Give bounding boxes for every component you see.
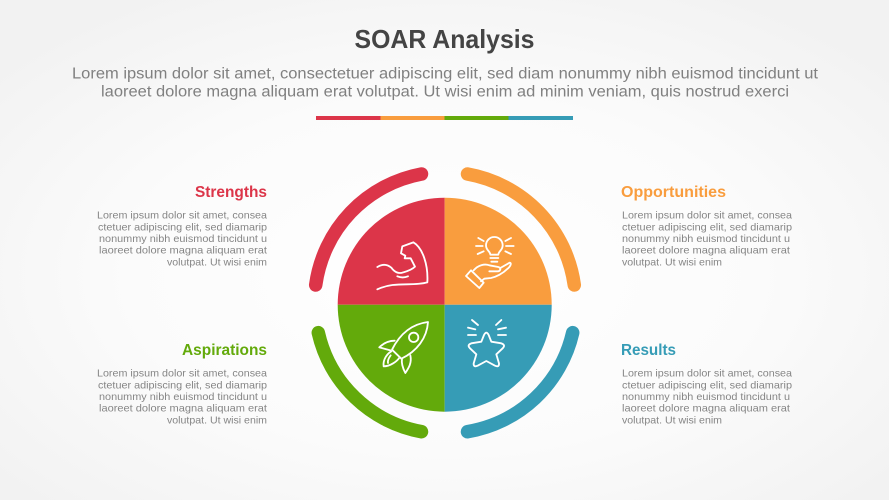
subtitle text [72,66,819,100]
results description: laoreet dolore magna aliquam erat [622,404,790,414]
quadrant: aspirations [338,305,445,412]
aspirations description: volutpat. Ut wisi enim [167,416,267,426]
results description: volutpat. Ut wisi enim [622,416,722,426]
quadrant: opportunities [445,198,552,305]
results description: nonummy nibh euismod tincidunt u [622,392,790,403]
title: SOAR Analysis [354,24,534,54]
quadrant: strengths [338,198,445,305]
opportunities description: Lorem ipsum dolor sit amet, consea [622,210,792,222]
panel: strengths text [97,184,267,268]
heading: opportunities: Opportunities [621,184,726,201]
strengths description: Lorem ipsum dolor sit amet, consea [97,210,267,222]
opportunities description [622,210,792,268]
strengths description [97,210,267,268]
opportunities description: volutpat. Ut wisi enim [622,258,722,268]
aspirations description: laoreet dolore magna aliquam erat [99,404,267,414]
results description: Lorem ipsum dolor sit amet, consea [622,368,792,380]
strengths description: laoreet dolore magna aliquam erat [99,246,267,256]
heading: strengths: Strengths [195,184,267,201]
panel: opportunities text [621,184,792,268]
icon: flexed arm [377,242,427,289]
panel: results text [621,342,792,426]
colour divider bar [316,116,573,120]
opportunities description: laoreet dolore magna aliquam erat [622,246,790,256]
icon: star with rays [468,320,506,366]
strengths description: volutpat. Ut wisi enim [167,258,267,268]
icon: light bulb in hand [466,237,514,288]
quadrant: results [445,305,552,412]
strengths description: nonummy nibh euismod tincidunt u [99,234,267,245]
heading: results: Results [621,342,676,359]
subtitle text: Lorem ipsum dolor sit amet, consectetuer adipiscing elit, sed diam nonummy nibh euismod tincidunt ut [72,66,819,82]
outer arc: strengths [316,174,422,285]
strengths description: ctetuer adipiscing elit, sed diamarip [98,222,267,234]
subtitle text: laoreet dolore magna aliquam erat volutpat. Ut wisi enim ad minim veniam, quis nostrud exerci [101,84,789,100]
heading: aspirations: Aspirations [182,342,267,359]
icon: rocket [379,322,428,373]
outer arc: results [468,333,573,432]
opportunities description: ctetuer adipiscing elit, sed diamarip [622,222,792,234]
results description: ctetuer adipiscing elit, sed diamarip [622,380,792,392]
aspirations description: Lorem ipsum dolor sit amet, consea [97,368,267,380]
outer arc: aspirations [318,333,422,432]
opportunities description: nonummy nibh euismod tincidunt u [622,234,790,245]
results description [622,368,792,426]
outer arc: opportunities [468,174,574,285]
aspirations description: ctetuer adipiscing elit, sed diamarip [98,380,267,392]
panel: aspirations text [97,342,267,426]
aspirations description: nonummy nibh euismod tincidunt u [99,392,267,403]
aspirations description [97,368,267,426]
